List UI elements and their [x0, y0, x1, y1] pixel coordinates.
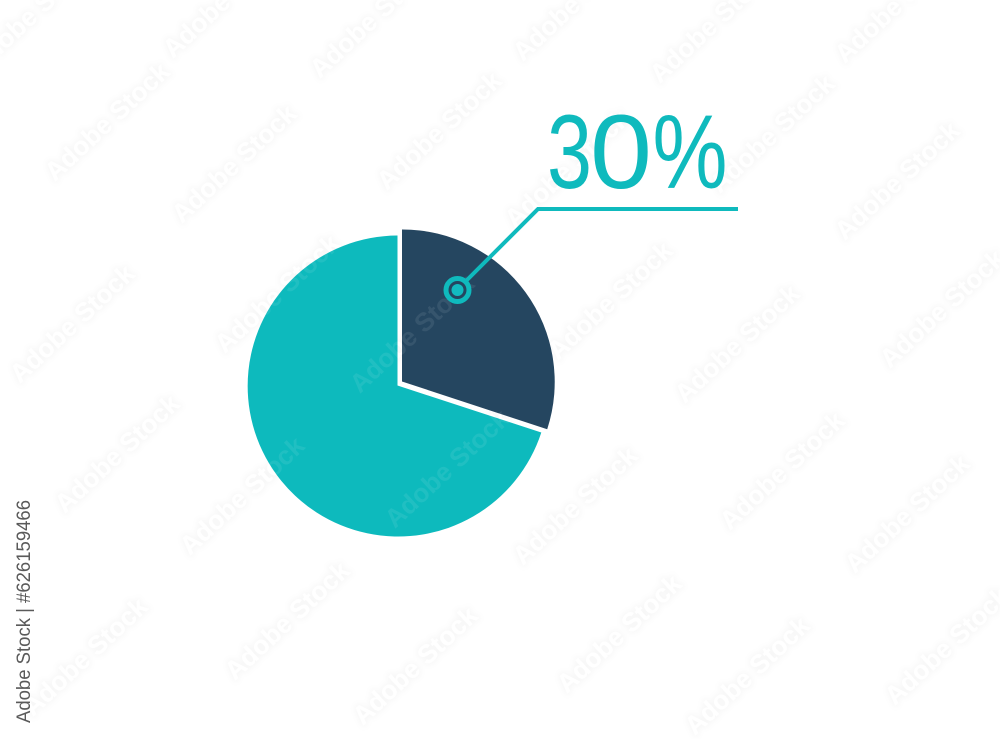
watermark pattern over the pie: Adobe Stock	[379, 403, 516, 534]
pie chart	[248, 229, 555, 536]
pie slice: highlighted 30%	[402, 229, 555, 429]
watermark pattern over the pie: Adobe Stock	[174, 430, 311, 561]
callout: leader line and marker	[446, 209, 738, 302]
digit 0: 0	[590, 94, 652, 211]
watermark pattern on white background: Adobe Stock	[379, 403, 516, 534]
watermark pattern on white background: Adobe Stock	[174, 430, 311, 561]
watermark pattern on white background: Adobe Stock	[499, 103, 636, 234]
digit 3: 3	[547, 94, 592, 211]
watermark pattern on white background: Adobe Stock	[507, 440, 644, 571]
watermark pattern on white background: Adobe Stock	[4, 258, 141, 389]
watermark pattern over the pie: Adobe Stock	[209, 228, 346, 359]
watermark pattern on white background: Adobe Stock	[49, 388, 186, 519]
watermark pattern on white background: Adobe Stock	[219, 555, 356, 686]
watermark pattern on white background: Adobe Stock	[39, 56, 176, 187]
watermark pattern on white background: Adobe Stock	[714, 405, 851, 536]
watermark pattern over the pie	[174, 228, 516, 561]
marker: outer ring	[446, 278, 469, 302]
pie slice: remaining 70%	[248, 236, 541, 536]
stock image ID: Adobe Stock | #626159466	[14, 500, 35, 723]
watermark pattern on white background: Adobe Stock	[679, 610, 816, 739]
watermark pattern on white background: Adobe Stock	[551, 568, 688, 699]
watermark pattern on white background: Adobe Stock	[17, 591, 154, 722]
watermark pattern on white background: Adobe Stock	[344, 268, 481, 399]
leader line	[458, 209, 738, 289]
percent sign: %	[652, 94, 728, 211]
watermark pattern on white background: Adobe Stock	[704, 68, 841, 199]
watermark pattern on white background: Adobe Stock	[166, 98, 303, 229]
marker: centre dot	[452, 284, 464, 296]
watermark pattern on white background: Adobe Stock	[371, 65, 508, 196]
watermark pattern over the pie: Adobe Stock	[344, 268, 481, 399]
watermark pattern on white background: Adobe Stock	[209, 228, 346, 359]
watermark pattern on white background: Adobe Stock	[669, 278, 806, 409]
watermark pattern on white background: Adobe Stock	[829, 115, 966, 246]
watermark pattern on white background: Adobe Stock	[542, 235, 679, 366]
value label: 30%	[547, 94, 728, 211]
watermark pattern on white background: Adobe Stock	[839, 448, 976, 579]
watermark pattern on white background: Adobe Stock	[347, 600, 484, 731]
